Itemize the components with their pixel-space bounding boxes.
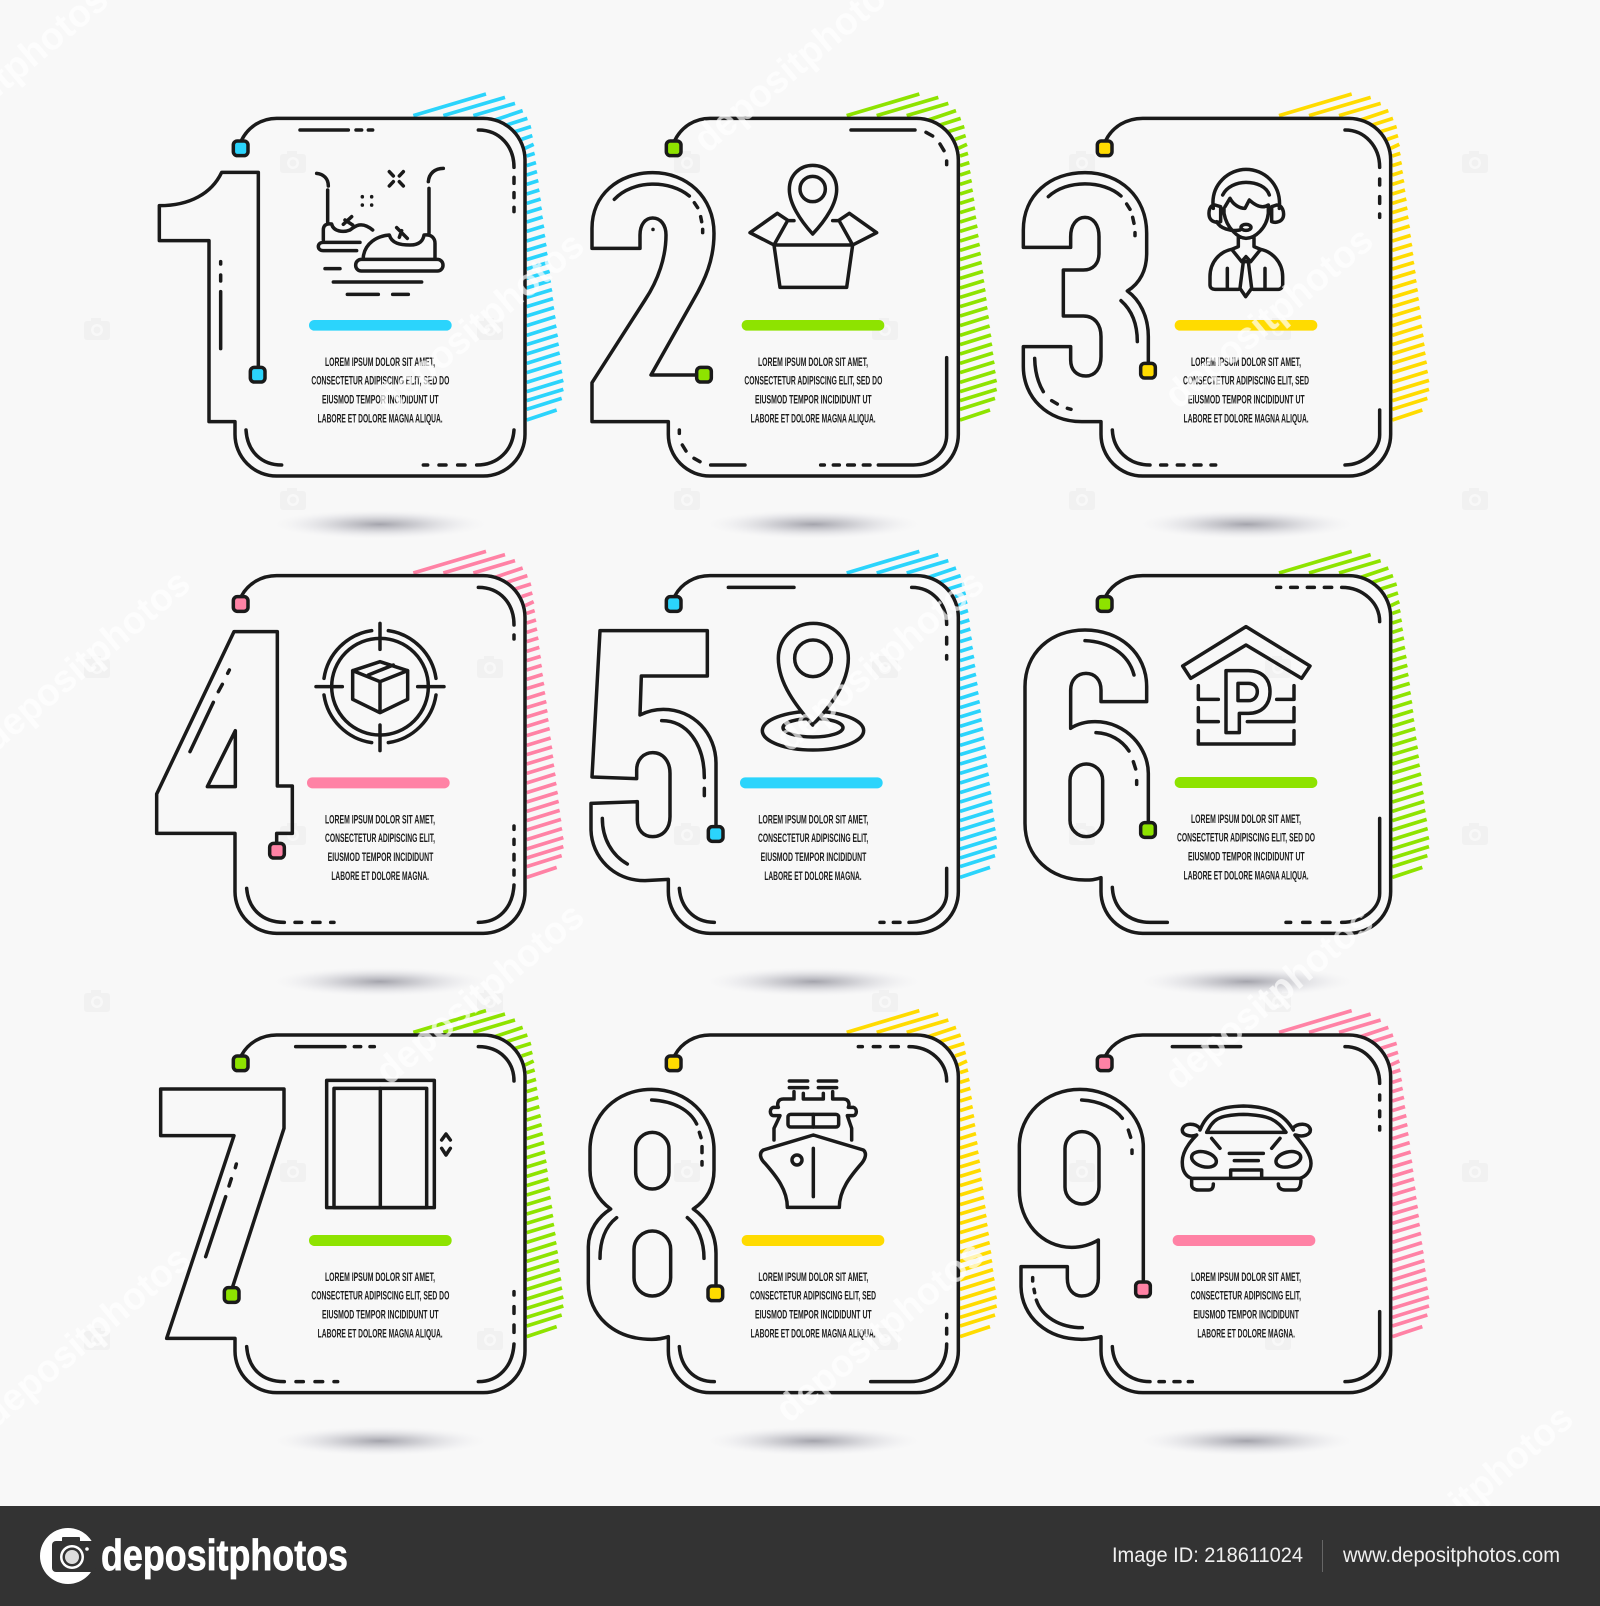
logo wordmark: depositphotos <box>101 1531 348 1580</box>
frame and numeral 9 <box>1019 1035 1391 1393</box>
colour bar <box>1175 320 1317 331</box>
text block: EIUSMOD TEMPOR INCIDIDUNT UT <box>755 1308 872 1322</box>
icon: car <box>1182 1106 1311 1190</box>
icon: support operator <box>1209 169 1284 297</box>
watermark text: depositphotos <box>768 562 992 760</box>
shadow <box>702 966 925 997</box>
icon: parking garage <box>1183 627 1310 744</box>
frame and numeral 5 <box>591 576 958 933</box>
text block <box>311 355 449 426</box>
frame and numeral 8 <box>588 1035 958 1393</box>
frame and numeral 2 <box>592 118 958 476</box>
panel: step 6 parking garage <box>1025 551 1429 997</box>
text block: LABORE ET DOLORE MAGNA ALIQUA. <box>1184 412 1309 426</box>
accent strokes <box>602 587 947 922</box>
accent strokes <box>206 1047 514 1382</box>
connector dots <box>666 141 711 382</box>
text block <box>1191 1270 1301 1340</box>
watermark camera marks <box>84 151 1488 1350</box>
watermark text: depositphotos <box>1357 1397 1581 1595</box>
text block: CONSECTETUR ADIPISCING ELIT, SED <box>750 1289 876 1303</box>
image id: Image ID: 218611024 <box>1112 1544 1303 1567</box>
numeral 6 counter <box>1070 764 1103 837</box>
text block: CONSECTETUR ADIPISCING ELIT, SED DO <box>311 1289 449 1303</box>
connector dots <box>666 597 723 841</box>
text block: LABORE ET DOLORE MAGNA ALIQUA. <box>1184 868 1309 882</box>
panel: step 4 parcel target <box>157 551 563 997</box>
hatch: green <box>847 94 997 420</box>
colour bar <box>742 320 884 331</box>
text block: LABORE ET DOLORE MAGNA ALIQUA. <box>751 412 876 426</box>
icon: target with parcel <box>316 623 444 751</box>
accent strokes <box>190 587 514 922</box>
text block: LOREM IPSUM DOLOR SIT AMET, <box>325 812 435 826</box>
panel: step 2 box with location pin <box>592 94 997 540</box>
text block: CONSECTETUR ADIPISCING ELIT, <box>758 831 868 845</box>
connector dots <box>1097 597 1155 837</box>
text block <box>1177 812 1315 882</box>
text block: EIUSMOD TEMPOR INCIDIDUNT UT <box>1188 393 1305 407</box>
text block <box>750 1270 876 1340</box>
watermark text: depositphotos <box>1157 900 1381 1098</box>
icon: bumper cars <box>317 168 443 294</box>
text block: CONSECTETUR ADIPISCING ELIT, SED <box>1183 374 1309 388</box>
icon: box with pin <box>750 165 877 287</box>
text block: EIUSMOD TEMPOR INCIDIDUNT <box>328 850 434 864</box>
text block: LABORE ET DOLORE MAGNA ALIQUA. <box>318 1326 443 1340</box>
hatch: yellow <box>1279 94 1429 420</box>
numeral 9 counter <box>1065 1132 1099 1204</box>
watermark text: depositphotos <box>1157 219 1381 417</box>
text block: CONSECTETUR ADIPISCING ELIT, SED DO <box>311 374 449 388</box>
colour bar <box>740 777 883 788</box>
accent strokes <box>1085 587 1380 922</box>
icon: elevator <box>327 1080 450 1208</box>
text block <box>758 812 868 883</box>
connector dots <box>1097 1056 1150 1297</box>
text block: LOREM IPSUM DOLOR SIT AMET, <box>325 355 435 369</box>
watermark text: depositphotos <box>368 224 592 422</box>
frame and numeral 3 <box>1023 118 1391 476</box>
text block <box>744 355 882 426</box>
hatch: blue <box>847 551 997 877</box>
text block: LABORE ET DOLORE MAGNA. <box>1197 1326 1295 1340</box>
text block: LABORE ET DOLORE MAGNA. <box>764 869 862 883</box>
frame and numeral 1 <box>159 118 525 476</box>
connector dots <box>224 1056 248 1302</box>
panel: step 7 elevator <box>161 1011 563 1456</box>
text block: EIUSMOD TEMPOR INCIDIDUNT UT <box>322 1308 439 1322</box>
connector dots <box>1097 141 1155 378</box>
numeral 8 counters <box>634 1132 671 1296</box>
text block <box>311 1270 449 1340</box>
text block: CONSECTETUR ADIPISCING ELIT, SED DO <box>1177 831 1315 845</box>
colour bar <box>307 777 450 788</box>
colour bar <box>309 1235 452 1246</box>
icon: camera logo <box>40 1528 96 1584</box>
icon: map pin on target <box>762 623 864 750</box>
connector dots <box>233 141 265 382</box>
colour bar <box>309 320 452 331</box>
text block: LOREM IPSUM DOLOR SIT AMET, <box>1191 355 1301 369</box>
text block: LABORE ET DOLORE MAGNA. <box>331 869 429 883</box>
shadow <box>702 509 925 540</box>
text block: EIUSMOD TEMPOR INCIDIDUNT UT <box>755 393 872 407</box>
accent strokes <box>221 130 514 465</box>
shadow <box>702 1426 925 1456</box>
text block: LOREM IPSUM DOLOR SIT AMET, <box>325 1270 435 1284</box>
connector dots <box>666 1056 723 1301</box>
shadow <box>268 966 492 997</box>
hatch: pink <box>1279 1011 1429 1337</box>
panel: step 3 support operator <box>1023 94 1429 540</box>
frame and numeral 7 <box>161 1035 525 1393</box>
accent strokes <box>600 1047 947 1382</box>
panel: step 1 bumper cars <box>159 94 563 540</box>
panel: step 5 map pin <box>591 551 997 997</box>
colour bar <box>1175 777 1317 788</box>
shadow <box>268 1426 492 1456</box>
text block: LOREM IPSUM DOLOR SIT AMET, <box>758 1270 868 1284</box>
shadow <box>1135 1426 1358 1456</box>
footer bar <box>0 1506 1600 1606</box>
shadow <box>268 509 492 540</box>
accent strokes <box>614 130 947 465</box>
frame and numeral 6 <box>1025 576 1391 933</box>
frame and numeral 4 <box>157 576 525 933</box>
text block: LOREM IPSUM DOLOR SIT AMET, <box>1191 1270 1301 1284</box>
panel: step 9 car <box>1019 1011 1429 1456</box>
panel: step 8 ship <box>588 1011 997 1456</box>
watermark text: depositphotos <box>768 1233 992 1431</box>
icon: ship <box>761 1081 865 1207</box>
hatch: yellow <box>847 1011 997 1337</box>
text block: EIUSMOD TEMPOR INCIDIDUNT UT <box>322 393 439 407</box>
text block: LOREM IPSUM DOLOR SIT AMET, <box>758 812 868 826</box>
text block: EIUSMOD TEMPOR INCIDIDUNT <box>1193 1308 1299 1322</box>
connector dots <box>233 597 284 858</box>
hatch: pink <box>413 551 563 877</box>
text block: LABORE ET DOLORE MAGNA ALIQUA. <box>751 1326 876 1340</box>
shadow <box>1135 966 1358 997</box>
text block: CONSECTETUR ADIPISCING ELIT, SED DO <box>744 374 882 388</box>
text block: LOREM IPSUM DOLOR SIT AMET, <box>1191 812 1301 826</box>
accent strokes <box>1033 1047 1380 1382</box>
text block: LOREM IPSUM DOLOR SIT AMET, <box>758 355 868 369</box>
colour bar <box>1173 1235 1315 1246</box>
text block <box>1183 355 1309 426</box>
shadow <box>1135 509 1358 540</box>
colour bar <box>742 1235 884 1246</box>
text block: EIUSMOD TEMPOR INCIDIDUNT UT <box>1188 850 1305 864</box>
text block: EIUSMOD TEMPOR INCIDIDUNT <box>761 850 867 864</box>
hatch: blue <box>413 94 563 420</box>
hatch: green <box>1279 551 1429 877</box>
text block: CONSECTETUR ADIPISCING ELIT, <box>325 831 435 845</box>
text block: LABORE ET DOLORE MAGNA ALIQUA. <box>318 412 443 426</box>
accent strokes <box>1035 130 1380 465</box>
text block <box>325 812 435 883</box>
website: www.depositphotos.com <box>1342 1544 1560 1567</box>
divider <box>1322 1540 1323 1572</box>
watermark text: depositphotos <box>368 895 592 1093</box>
text block: CONSECTETUR ADIPISCING ELIT, <box>1191 1289 1301 1303</box>
hatch: green <box>413 1011 563 1337</box>
